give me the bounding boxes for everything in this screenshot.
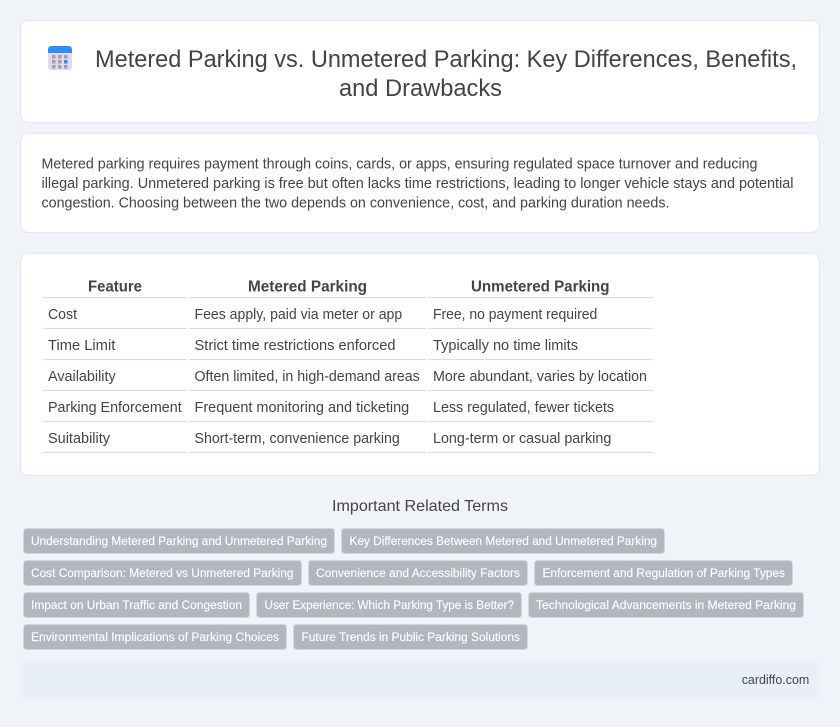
panel: comparison table xyxy=(20,254,820,476)
text block: summary xyxy=(42,156,794,212)
table row: parking enforcement: Frequent monitoring and ticketing xyxy=(194,400,409,416)
tag xyxy=(528,592,804,618)
tag: User Experience: Which Parking Type is Better? xyxy=(264,598,514,612)
title xyxy=(95,46,797,102)
tag xyxy=(294,624,528,650)
table row: cost: Fees apply, paid via meter or app xyxy=(194,307,402,323)
table header row: Feature xyxy=(88,278,142,296)
icon: calendar xyxy=(48,46,72,70)
table row: time limit: Time Limit xyxy=(48,338,115,354)
table row: time limit xyxy=(48,338,578,354)
table row: parking enforcement xyxy=(48,400,614,416)
table row: parking enforcement: Less regulated, fewer tickets xyxy=(433,400,614,416)
title: and Drawbacks xyxy=(339,75,502,102)
tag xyxy=(342,528,664,554)
tag xyxy=(24,592,250,618)
title: Metered Parking vs. Unmetered Parking: Key Differences, Benefits, xyxy=(95,46,797,73)
tag xyxy=(24,624,286,650)
tag xyxy=(24,528,334,554)
tag list: related terms xyxy=(24,528,804,650)
table row: availability: More abundant, varies by location xyxy=(433,369,647,385)
table row: time limit: Strict time restrictions enforced xyxy=(194,338,396,354)
tag: Impact on Urban Traffic and Congestion xyxy=(31,598,242,612)
table row: cost: Cost xyxy=(48,307,77,323)
table row: cost xyxy=(48,307,597,323)
table row: suitability: Long-term or casual parking xyxy=(433,431,611,447)
footer bar xyxy=(20,663,820,697)
tag: Understanding Metered Parking and Unmetered Parking xyxy=(31,534,327,548)
table row: suitability: Short-term, convenience parking xyxy=(194,431,400,447)
text block: summary: congestion. Choosing between the two depends on convenience, cost, and parking duration needs. xyxy=(42,196,670,212)
heading: important related terms: Important Related Terms xyxy=(332,498,508,515)
panel: summary text xyxy=(20,134,820,232)
table header row: Metered Parking xyxy=(248,278,367,296)
table header row: Unmetered Parking xyxy=(471,278,610,296)
tag: Cost Comparison: Metered vs Unmetered Parking xyxy=(31,566,294,580)
tag: Enforcement and Regulation of Parking Types xyxy=(542,566,785,580)
table row: parking enforcement: Parking Enforcement xyxy=(48,400,182,416)
tag: Convenience and Accessibility Factors xyxy=(316,566,520,580)
table row: suitability xyxy=(48,431,611,447)
text block: summary: Metered parking requires payment through coins, cards, or apps, ensuring regulated space turnover and reducing xyxy=(42,156,758,172)
table header row xyxy=(88,278,610,296)
tag: Future Trends in Public Parking Solutions xyxy=(302,630,520,644)
text block: summary: illegal parking. Unmetered parking is free but often lacks time restrictions, leading to longer vehicle stays and potential xyxy=(42,176,794,192)
panel: title header xyxy=(20,20,820,122)
table row: availability xyxy=(48,369,647,385)
table row: suitability: Suitability xyxy=(48,431,111,447)
tag xyxy=(308,560,528,586)
table row: availability: Availability xyxy=(48,369,116,385)
tag xyxy=(256,592,522,618)
tag: Environmental Implications of Parking Choices xyxy=(31,630,279,644)
table row: availability: Often limited, in high-demand areas xyxy=(194,369,420,385)
table row: time limit: Typically no time limits xyxy=(433,338,578,354)
tag xyxy=(24,560,302,586)
tag xyxy=(534,560,792,586)
tag: Key Differences Between Metered and Unmetered Parking xyxy=(350,534,657,548)
tag: Technological Advancements in Metered Parking xyxy=(536,598,796,612)
footer: site name: cardiffo.com xyxy=(742,673,809,687)
table row: cost: Free, no payment required xyxy=(433,307,597,323)
